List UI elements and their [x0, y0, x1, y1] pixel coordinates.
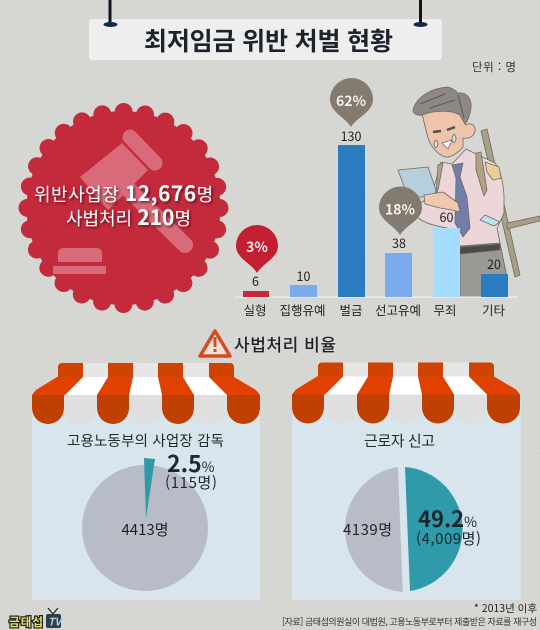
callout: 49.2%: 49.2% — [418, 502, 477, 534]
logo: TV — [48, 614, 64, 630]
bar: 무죄 — [433, 228, 460, 297]
bar: 실형 — [243, 291, 269, 297]
bar: 집행유예 — [290, 285, 317, 297]
pie chart — [343, 467, 463, 592]
source: [자료] 금태섭의원실이 대법원, 고용노동부로부터 제출받은 자료를 재구성 — [282, 615, 537, 628]
bar labels: 벌금 — [339, 300, 363, 319]
pie chart — [82, 458, 208, 591]
bar: 선고유예 — [385, 253, 412, 297]
badge: violations with gavel — [26, 111, 220, 305]
bar labels — [243, 300, 505, 319]
bar values — [252, 126, 501, 290]
section heading: 사법처리 비율 — [234, 331, 336, 356]
panel: worker reports — [292, 362, 521, 600]
bar values: 130 — [341, 126, 361, 145]
bar values: 60 — [440, 207, 453, 226]
marker: 3%: 3% — [246, 237, 268, 257]
icon: warning triangle — [200, 331, 230, 356]
badge text — [34, 178, 214, 232]
bar chart — [235, 126, 518, 319]
bar labels: 선고유예 — [375, 300, 421, 319]
bar values: 20 — [487, 254, 501, 273]
pie chart: 4139명 — [343, 519, 392, 540]
badge text: 사법처리 210명 — [66, 202, 191, 232]
icon: awning — [32, 363, 260, 424]
footnote: * 2013년 이후 — [474, 601, 537, 616]
bar values: 6 — [252, 271, 259, 290]
panel: labor ministry inspection — [32, 363, 260, 600]
title banner — [89, 0, 442, 60]
bar: 기타 — [481, 274, 508, 297]
callout: 2.5%: 2.5% — [167, 445, 215, 479]
bar labels: 실형 — [243, 300, 267, 319]
marker: 18% — [379, 186, 422, 235]
title banner: 최저임금 위반 처벌 현황 — [144, 22, 393, 58]
marker: 62%: 62% — [336, 91, 367, 111]
bar values: 10 — [297, 266, 310, 285]
bar labels: 집행유예 — [279, 300, 326, 319]
icon: awning — [292, 362, 520, 424]
unit label: 단위 : 명 — [472, 59, 516, 75]
marker: 3% — [236, 225, 278, 273]
bar: 벌금 — [338, 145, 365, 297]
bar values: 38 — [392, 233, 406, 252]
panel title: 근로자 신고 — [364, 430, 435, 451]
marker: 18%: 18% — [385, 200, 416, 220]
bar labels: 기타 — [482, 300, 505, 319]
pie chart: 4413명 — [121, 519, 169, 540]
marker: 62% — [330, 78, 373, 127]
illustration: crying worker with pole and tablet — [398, 87, 540, 297]
badge text: 위반사업장 12,676명 — [34, 178, 214, 208]
icon: gavel — [53, 137, 185, 274]
logo — [9, 608, 64, 630]
callout: 4,009 people: (4,009명) — [416, 528, 481, 549]
logo: 금태섭 — [9, 614, 43, 630]
callout: 115 people: (115명) — [165, 472, 217, 493]
bar labels: 무죄 — [433, 300, 457, 319]
panel title: 고용노동부의 사업장 감독 — [67, 430, 224, 451]
